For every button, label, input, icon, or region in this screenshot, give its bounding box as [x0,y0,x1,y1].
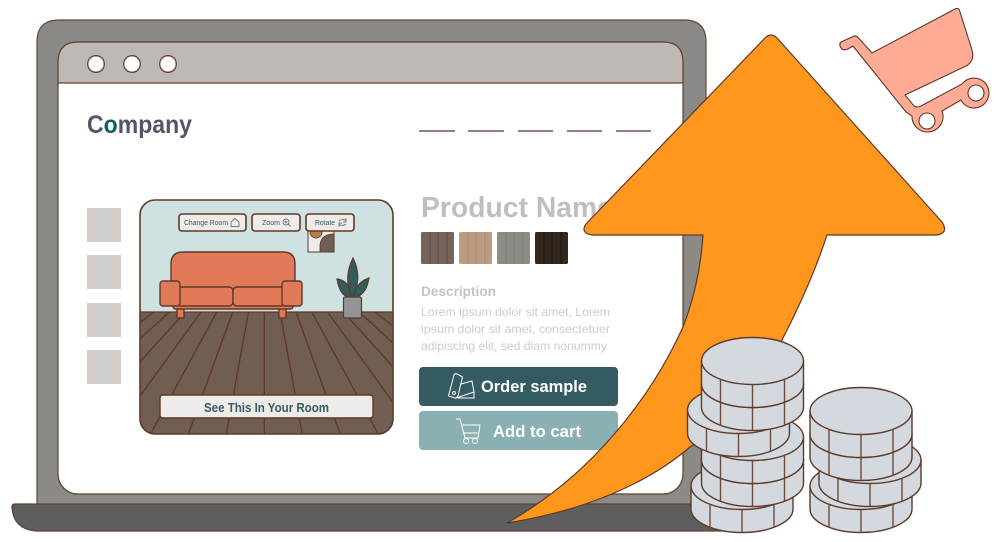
laptop lid [37,20,706,510]
growth arrow [507,35,945,523]
add to cart button [419,411,618,450]
potted plant [337,258,369,318]
navigation dashes [419,130,651,132]
description text: ipsum dolor sit amet, consectetuer [421,322,610,336]
thumbnails [87,208,121,384]
wall art [308,226,334,252]
order sample button [419,367,618,406]
title bar [58,42,683,83]
coin stack left [688,338,804,532]
add to cart button: Add to cart [493,423,582,441]
colour swatches [421,232,568,264]
description heading: Description [421,284,496,299]
company logo: Company [87,111,192,139]
button: see this in your room [160,395,373,418]
shopping cart icon [840,8,989,132]
order sample button: Order sample [481,378,587,396]
coin stack right [810,388,921,532]
button: see this in your room: See This In Your Room [204,401,329,415]
button: zoom: Zoom [262,220,280,227]
button: change room: Change Room [184,220,228,227]
button: rotate [306,214,354,231]
room preview panel [139,199,394,435]
button: change room [179,214,246,231]
browser window [58,42,683,494]
description text [421,305,610,353]
sofa [160,252,302,318]
product name: Product Name [421,192,613,224]
icon: swatch fan [448,374,474,398]
window dots [88,56,176,72]
button: rotate: Rotate [315,220,335,227]
button: zoom [252,214,300,231]
description text: Lorem ipsum dolor sit amet, Lorem [421,305,610,319]
icon: cart outline [456,419,480,444]
laptop [12,20,725,531]
description text: adipiscing elit, sed diam nonummy [421,339,607,353]
laptop base [12,504,725,531]
